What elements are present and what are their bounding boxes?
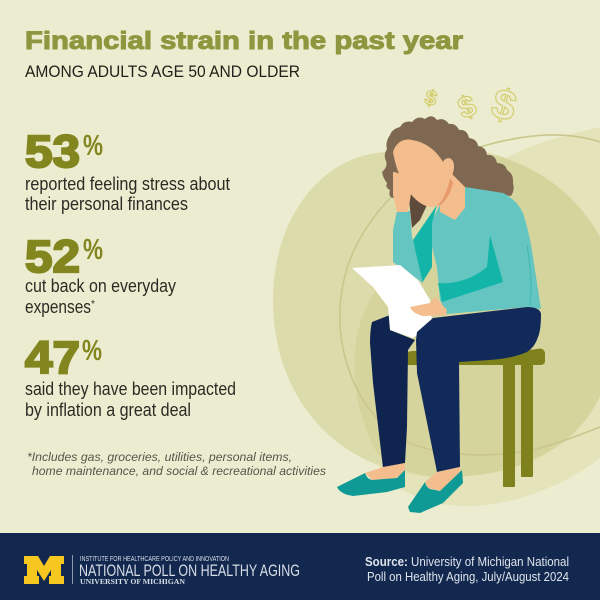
icon: floating dollar signs: $ bbox=[422, 86, 440, 111]
inner sleeve bbox=[413, 205, 437, 283]
stat: 53 percent bbox=[25, 126, 230, 214]
source credit: Source: University of Michigan National bbox=[365, 554, 569, 569]
paper bbox=[352, 265, 432, 338]
illustration: seated woman reading a bill bbox=[337, 116, 545, 513]
raised arm bbox=[393, 211, 423, 283]
stat: 53 percent: % bbox=[83, 130, 103, 162]
logo: block M bbox=[24, 556, 64, 584]
face bbox=[393, 140, 454, 207]
footnote: *Includes gas, groceries, utilities, personal items, bbox=[27, 450, 292, 464]
title: Financial strain in the past year bbox=[25, 27, 463, 55]
neck shadow bbox=[437, 178, 453, 205]
stat: 47 percent: % bbox=[82, 335, 102, 367]
stat: 47 percent bbox=[25, 332, 236, 420]
sweater shadow fold bbox=[438, 235, 503, 302]
poll name: INSTITUTE FOR HEALTHCARE POLICY AND INNOVATION bbox=[80, 556, 229, 563]
front leg bbox=[416, 307, 541, 472]
illustration backdrop shapes bbox=[273, 127, 600, 506]
holding hand bbox=[410, 297, 447, 316]
right foot bbox=[425, 467, 460, 491]
stat: 47 percent: 47 bbox=[25, 332, 80, 383]
icon: floating dollar signs: $ bbox=[454, 89, 481, 126]
stat: 47 percent: said they have been impacted bbox=[25, 379, 236, 399]
stat: 52 percent: cut back on everyday bbox=[25, 276, 176, 296]
stat: 52 percent: * bbox=[91, 299, 95, 310]
hair bbox=[382, 116, 514, 198]
logo divider bbox=[72, 555, 73, 584]
footer band bbox=[0, 533, 600, 600]
poll name: UNIVERSITY OF MICHIGAN bbox=[80, 577, 186, 586]
neck bbox=[436, 172, 465, 220]
subtitle: AMONG ADULTS AGE 50 AND OLDER bbox=[25, 62, 300, 81]
hand on head bbox=[393, 172, 411, 212]
stat: 53 percent: their personal finances bbox=[25, 194, 188, 214]
left shoe bbox=[337, 470, 405, 496]
stat: 53 percent: 53 bbox=[25, 126, 80, 177]
back leg bbox=[370, 315, 415, 468]
sweater body bbox=[432, 187, 541, 314]
footnote: home maintenance, and social & recreational activities bbox=[32, 464, 326, 478]
stat: 52 percent: % bbox=[83, 234, 103, 266]
icon: floating dollar signs bbox=[422, 79, 521, 130]
source credit bbox=[365, 554, 569, 584]
stool bbox=[407, 348, 545, 487]
stat: 52 percent bbox=[25, 231, 176, 317]
poll name bbox=[79, 556, 300, 586]
source credit: Poll on Healthy Aging, July/August 2024 bbox=[367, 569, 569, 584]
footnote bbox=[27, 450, 326, 478]
left foot bbox=[365, 463, 405, 480]
poll name: NATIONAL POLL ON HEALTHY AGING bbox=[79, 561, 300, 580]
stat: 52 percent: expenses bbox=[25, 297, 91, 317]
stat: 53 percent: reported feeling stress about bbox=[25, 174, 230, 194]
stat: 47 percent: by inflation a great deal bbox=[25, 400, 191, 420]
stat: 52 percent: 52 bbox=[25, 231, 80, 282]
shadowed hair bbox=[408, 190, 427, 228]
right shoe bbox=[408, 470, 463, 513]
sleeve seam bbox=[527, 245, 531, 305]
icon: floating dollar signs: $ bbox=[487, 79, 521, 130]
